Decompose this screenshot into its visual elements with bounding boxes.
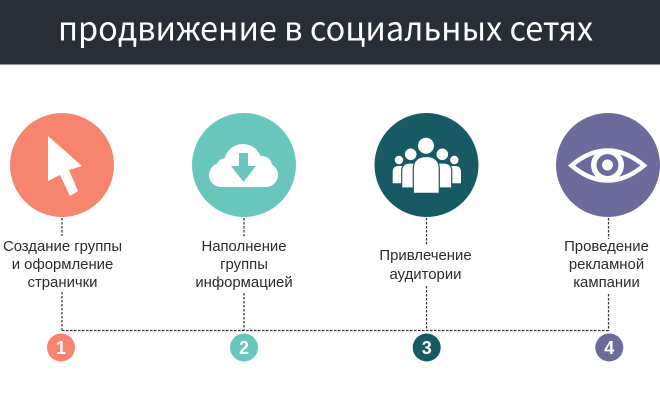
step 1: circle with cursor icon (10, 113, 114, 217)
label: step 3 (379, 248, 472, 283)
label: step 3: аудитории (390, 267, 461, 283)
label: step 4: кампании (573, 275, 640, 291)
number badge 1: 1 (56, 338, 66, 358)
number badge 1 (47, 334, 75, 362)
dotted connector network (62, 218, 608, 331)
step 3: circle with people icon (374, 113, 478, 217)
label: step 4 (564, 239, 649, 291)
number badge 2 (230, 334, 258, 362)
number badge 4 (595, 334, 623, 362)
title: продвижение в социальных сетях (58, 3, 593, 51)
number badge 3: 3 (422, 338, 432, 358)
label: step 4: рекламной (569, 257, 644, 273)
header band (0, 0, 660, 64)
label: step 1: и оформление (12, 257, 113, 273)
label: step 2: группы (220, 257, 268, 273)
step 4: circle with eye icon (556, 113, 660, 217)
label: step 2: информацией (195, 275, 293, 291)
icon: audience (393, 138, 461, 193)
label: step 2: Наполнение (201, 239, 287, 255)
icon: eye (572, 148, 644, 182)
number badge 3 (413, 334, 441, 362)
label: step 3: Привлечение (379, 248, 472, 264)
label: step 4: Проведение (564, 239, 649, 255)
number badge 2: 2 (239, 338, 249, 358)
label: step 1: странички (28, 275, 97, 291)
icon: cloud download (209, 144, 278, 187)
label: step 1 (3, 239, 122, 291)
label: step 1: Создание группы (3, 239, 122, 255)
step 2: circle with cloud icon (192, 113, 296, 217)
label: step 2 (195, 239, 293, 291)
number badge 4: 4 (604, 338, 614, 358)
icon: cursor arrow (48, 136, 82, 196)
